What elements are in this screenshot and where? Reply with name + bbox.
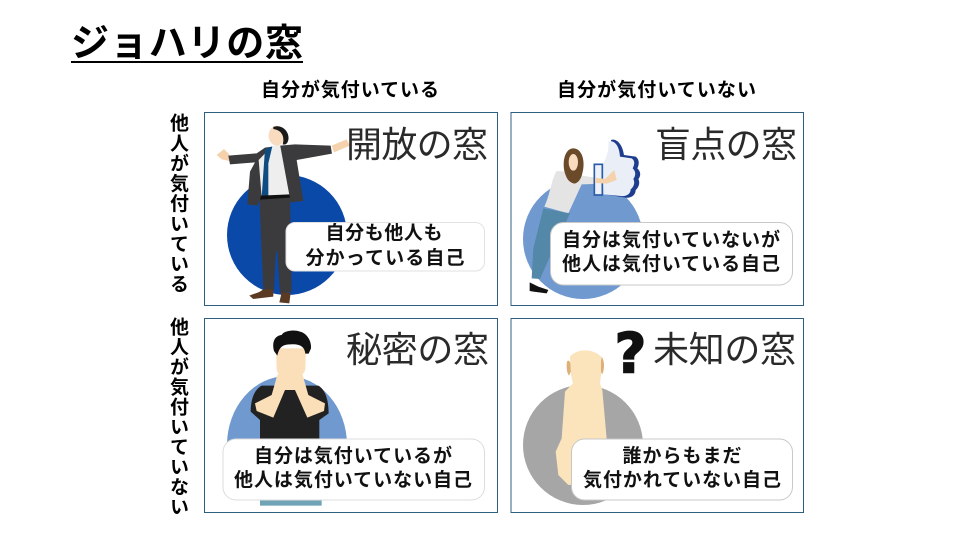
callout: 気付かれていない自己 xyxy=(583,469,781,491)
icon: man covering his mouth xyxy=(251,330,329,506)
circle: blind window xyxy=(523,179,643,299)
window name: 盲点の窓 xyxy=(655,124,797,165)
icon: dog from behind xyxy=(556,350,608,485)
icon: question mark: ? xyxy=(615,322,646,386)
callout xyxy=(286,222,484,271)
window name: 未知の窓 xyxy=(653,329,796,370)
callout: 自分は気付いていないが xyxy=(562,228,780,251)
callout xyxy=(572,439,792,500)
row heading: others unaware: 他人が気付いていない xyxy=(167,317,188,516)
callout xyxy=(223,439,484,500)
circle: unknown window xyxy=(523,385,643,505)
icon: woman with thumbs up xyxy=(530,140,640,293)
window name: 秘密の窓 xyxy=(346,329,489,370)
callout: 他人は気付いている自己 xyxy=(562,253,780,275)
column heading: self unaware: 自分が気付いていない xyxy=(557,78,756,101)
panel: unknown window xyxy=(511,318,804,512)
column heading: self aware: 自分が気付いている xyxy=(261,78,439,101)
panel: blind window xyxy=(511,112,804,306)
callout: 分かっている自己 xyxy=(306,247,464,269)
callout: 誰からもまだ xyxy=(622,445,742,467)
title: ジョハリの窓 xyxy=(71,23,303,65)
icon: businessman with open arms xyxy=(217,126,350,303)
circle: open window xyxy=(227,175,347,295)
panel: secret window xyxy=(204,318,498,512)
callout: 他人は気付いていない自己 xyxy=(234,469,472,491)
window name: 開放の窓 xyxy=(346,124,488,165)
callout: 自分は気付いているが xyxy=(254,444,452,467)
callout: 自分も他人も xyxy=(326,222,442,244)
callout xyxy=(550,222,792,285)
circle: secret window xyxy=(227,376,347,445)
row heading: others aware: 他人が気付いている xyxy=(167,113,188,293)
panel: open window xyxy=(204,112,498,306)
